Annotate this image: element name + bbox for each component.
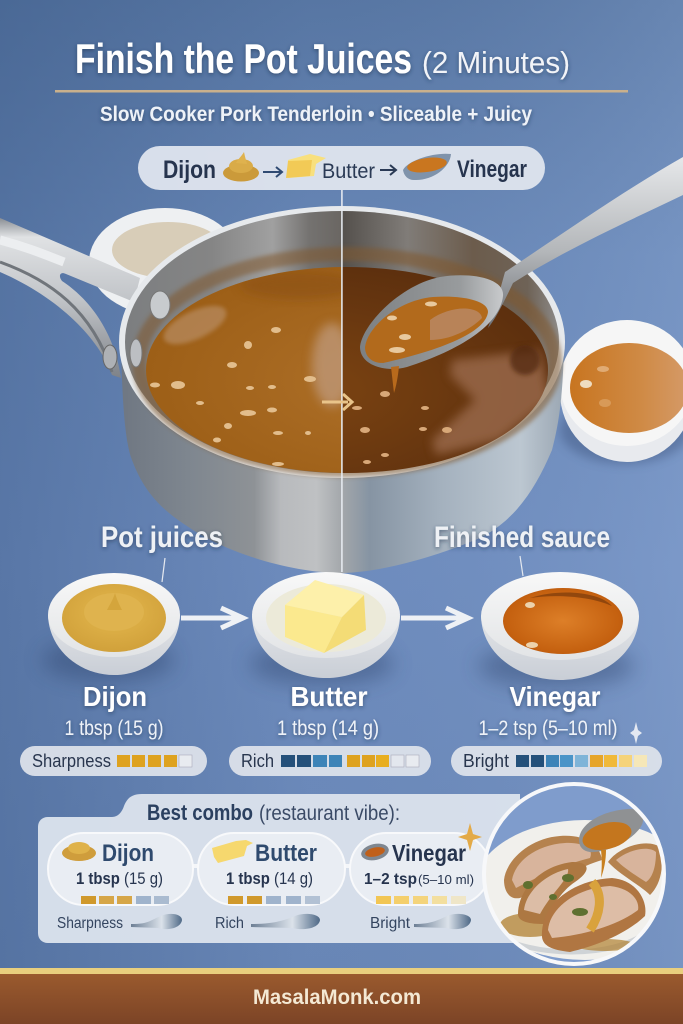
label: rich: [215, 914, 320, 932]
label: sharpness: [57, 914, 182, 932]
sparkle: [458, 823, 482, 851]
ingredient: dijon: 1 tbsp (15 g): [64, 717, 164, 740]
bowl: dijon: [42, 573, 180, 682]
sequence pill: Vinegar: [457, 156, 527, 183]
capsule: butter: [198, 833, 345, 905]
ingredient: vinegar: Vinegar: [510, 681, 601, 712]
centre divider: [341, 190, 343, 572]
sauce drip: [391, 366, 399, 393]
capsule: vinegar: (5–10 ml): [418, 872, 474, 887]
sequence pill: Dijon: [163, 156, 216, 184]
ingredient: butter: Butter: [290, 681, 368, 712]
ladle spoon: [360, 157, 683, 393]
bowl: butter: [250, 572, 400, 686]
arrow: butter to vinegar: [401, 608, 468, 628]
capsule: dijon: Dijon: [102, 840, 154, 867]
meter: bright: Bright: [463, 751, 509, 771]
ingredient: dijon: Dijon: [83, 681, 147, 712]
arrow: before to after: [322, 394, 352, 410]
sequence pill: Butter: [322, 160, 375, 183]
icon: vinegar dish: [403, 154, 451, 180]
front slice: [542, 878, 645, 952]
meter: sharpness: [20, 746, 207, 776]
title: Finish the Pot Juices: [75, 35, 412, 82]
ingredient: butter: [277, 681, 379, 740]
ingredient: vinegar: 1–2 tsp (5–10 ml): [478, 717, 618, 740]
combo heading: (restaurant vibe):: [259, 802, 400, 825]
callout: pot juices: Pot juices: [101, 521, 223, 554]
capsule: butter: 1 tbsp (14 g): [226, 870, 313, 888]
icon: butter: [286, 154, 326, 178]
side bowl: rice: [89, 208, 241, 316]
meter: rich: [229, 746, 431, 776]
callout: finished sauce: Finished sauce: [434, 521, 610, 554]
pan body: [121, 345, 564, 573]
plate: [486, 820, 662, 960]
label: sharpness: Sharpness: [57, 915, 123, 932]
meter: bright: [451, 746, 662, 776]
arrow: dijon to butter: [181, 608, 243, 628]
bowl: vinegar: [478, 572, 639, 688]
subtitle: Slow Cooker Pork Tenderloin • Sliceable + Juicy: [100, 103, 532, 126]
rivets: [103, 291, 170, 369]
sequence pill: [138, 146, 545, 190]
capsule: butter: Butter: [255, 840, 317, 867]
footer band: MasalaMonk.com: [253, 986, 421, 1009]
side bowl: finished sauce: [560, 320, 683, 464]
label: rich: Rich: [215, 915, 244, 932]
meter: rich: Rich: [241, 751, 274, 771]
panel: best combo: [38, 794, 520, 943]
capsule: vinegar: 1–2 tsp: [364, 871, 417, 888]
small spoon: [579, 809, 643, 852]
icon: mustard dollop: [223, 152, 259, 182]
sparkle: [630, 722, 642, 744]
pan handle: [0, 218, 140, 378]
ingredient: dijon: [64, 681, 164, 740]
saucepan: [103, 206, 565, 573]
callout: finished sauce: [434, 521, 610, 576]
right slice: [608, 843, 662, 895]
combo heading: Best combo: [147, 800, 253, 825]
photo: sliced pork: [482, 782, 666, 966]
capsule: dijon: 1 tbsp (15 g): [76, 870, 163, 888]
capsule: vinegar: Vinegar: [392, 840, 466, 866]
footer band: [0, 968, 683, 1024]
pot juices (left half): [146, 267, 342, 473]
pan rim: [119, 206, 565, 478]
combo heading: [147, 800, 400, 825]
meter: sharpness: Sharpness: [32, 751, 111, 771]
ingredient: butter: 1 tbsp (14 g): [277, 717, 379, 740]
capsule: vinegar: [350, 833, 490, 905]
back slice: [504, 836, 602, 898]
ingredient: vinegar: [478, 681, 618, 740]
label: bright: [370, 914, 471, 932]
capsule: dijon: [48, 833, 193, 905]
inner wall: [125, 211, 342, 473]
title: (2 Minutes): [422, 45, 570, 80]
label: bright: Bright: [370, 915, 411, 932]
callout: pot juices: [101, 521, 223, 582]
middle slice: [518, 862, 587, 924]
finished sauce (right half): [342, 267, 548, 473]
